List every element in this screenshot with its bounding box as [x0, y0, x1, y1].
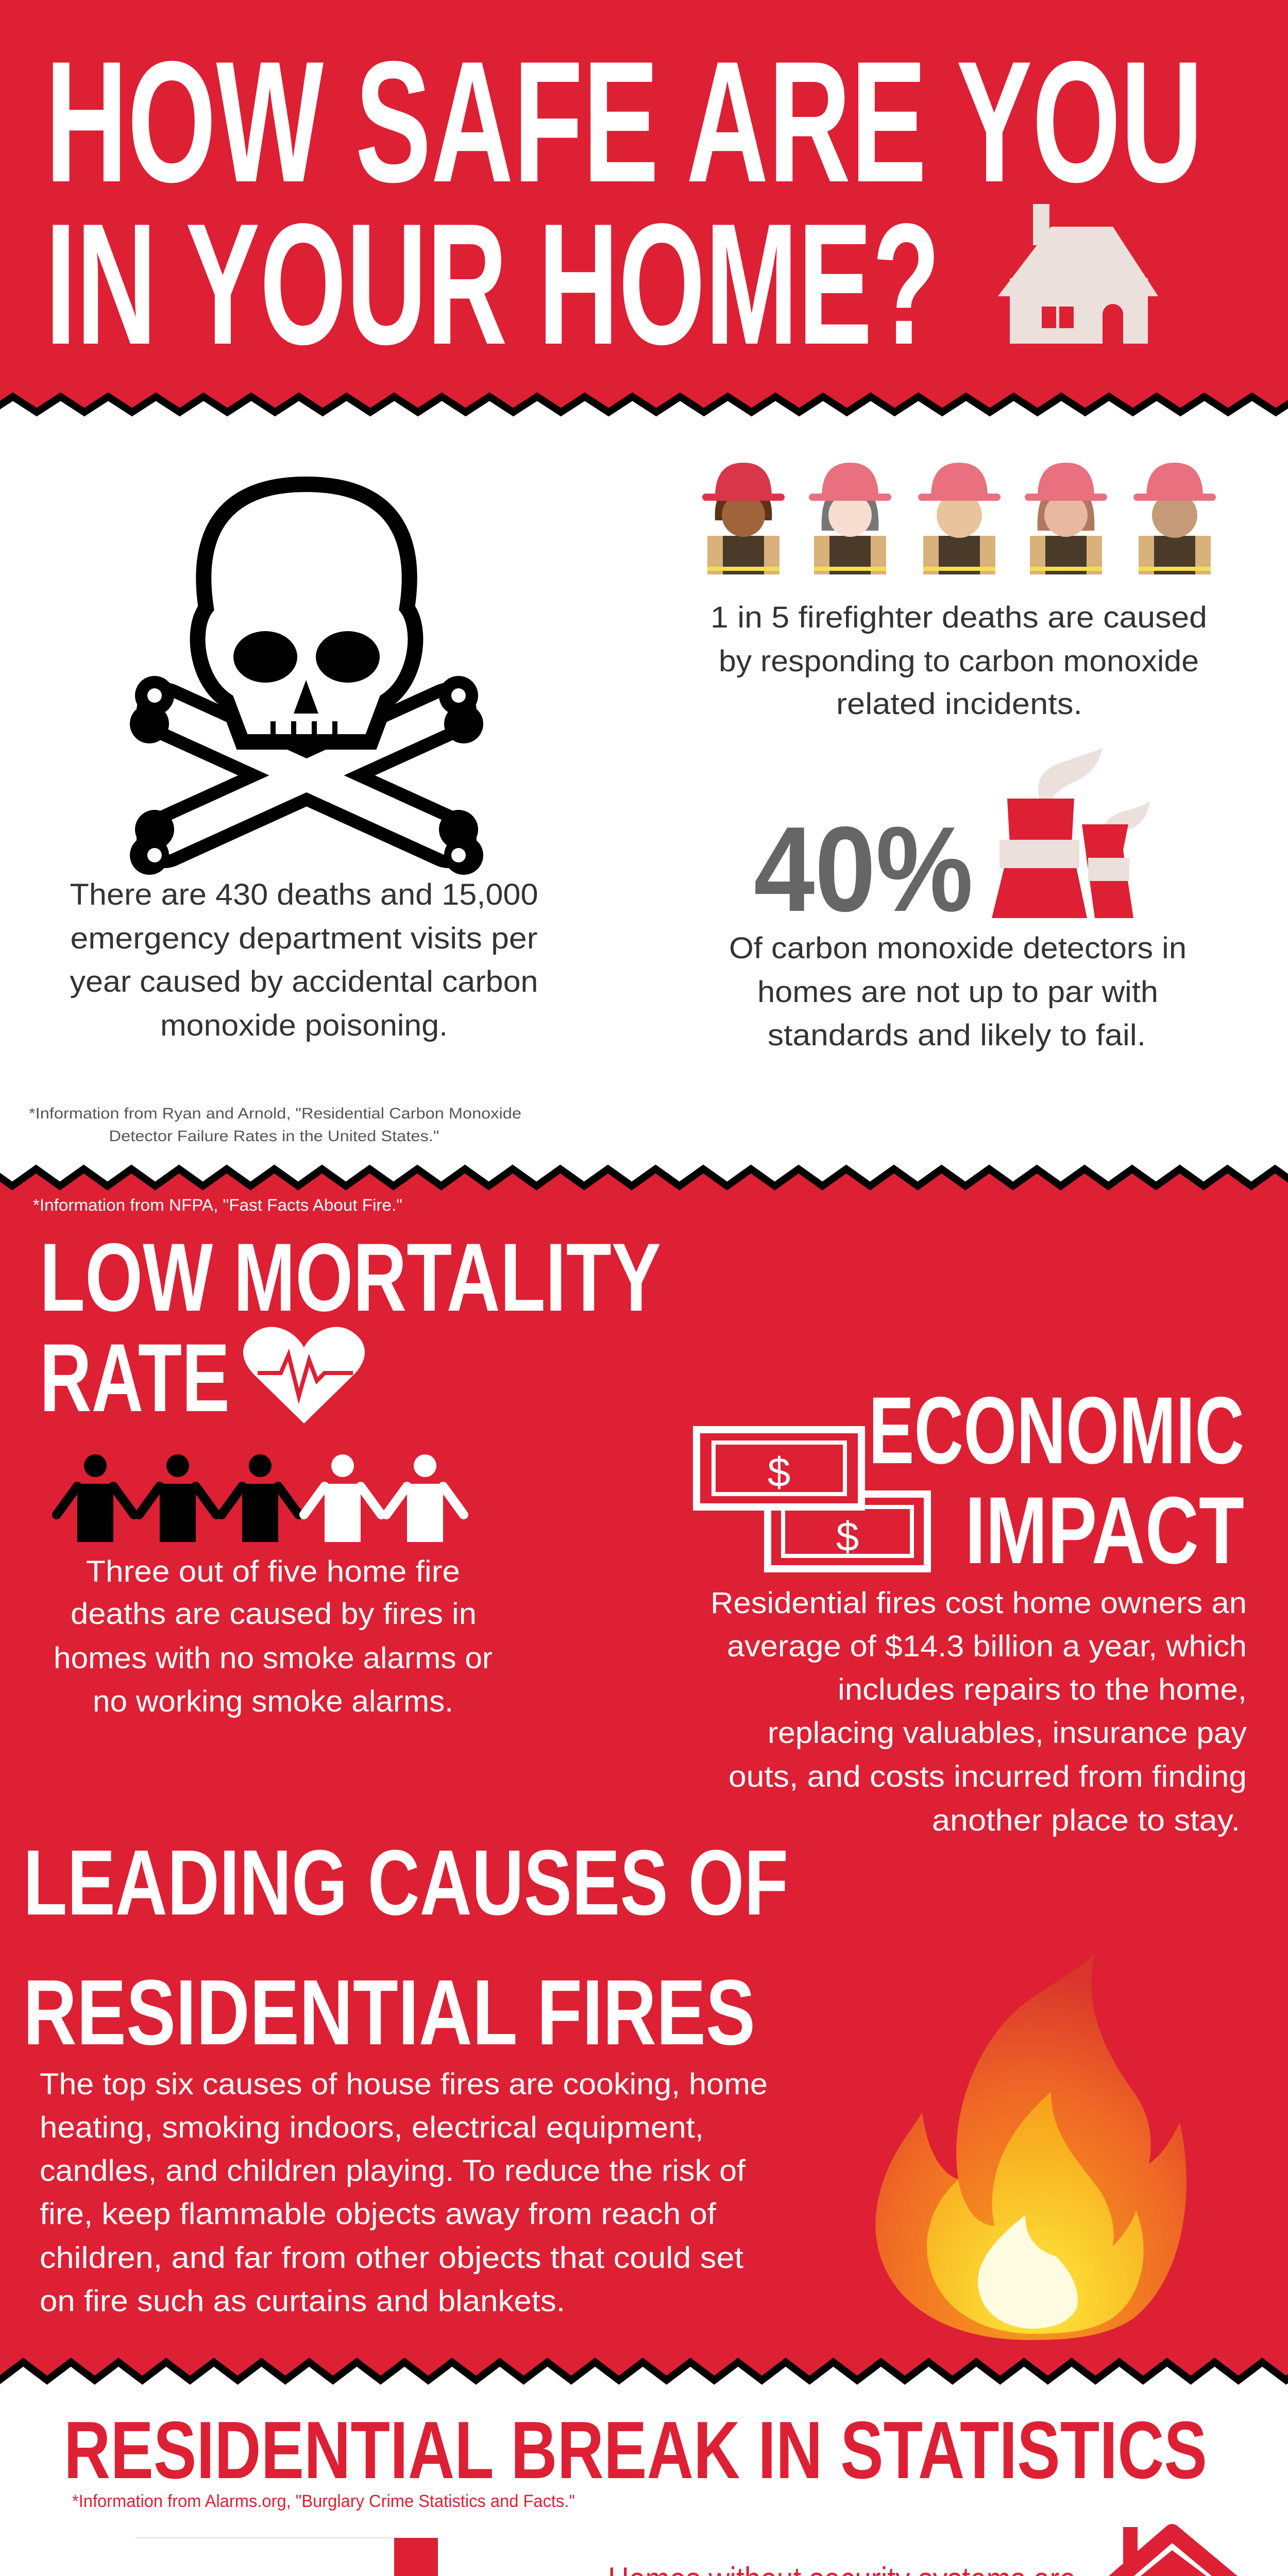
- icon: money bills: [697, 1430, 927, 1569]
- icon: five firefighters: [702, 463, 1216, 574]
- text: causes paragraph: fire, keep flammable objects away from reach of: [40, 2197, 717, 2231]
- icon: heart with pulse: [243, 1327, 365, 1423]
- footnote: Ryan and Arnold: *Information from Ryan and Arnold, "Residential Carbon Monoxide: [29, 1105, 521, 1122]
- text: smoke alarms: no working smoke alarms.: [93, 1685, 453, 1718]
- text: carbon monoxide deaths: There are 430 deaths and 15,000: [70, 878, 538, 911]
- text: 40% detectors: standards and likely to fail.: [768, 1019, 1146, 1052]
- text: firefighter deaths: 1 in 5 firefighter deaths are caused: [710, 601, 1207, 634]
- heading: leading causes of residential fires: RESIDENTIAL FIRES: [23, 1961, 755, 2064]
- text: 40% detectors: homes are not up to par with: [757, 975, 1158, 1009]
- heading: leading causes of residential fires: LEADING CAUSES OF: [23, 1831, 788, 1935]
- icon: skull and crossbones: [130, 484, 483, 875]
- heading: economic impact: [869, 1378, 1244, 1584]
- text: smoke alarms: Three out of five home fire: [86, 1555, 460, 1588]
- text: smoke alarms: deaths are caused by fires in: [71, 1597, 477, 1631]
- title: [45, 25, 1203, 380]
- text: economic impact: average of $14.3 billion a year, which: [727, 1630, 1247, 1663]
- text: causes paragraph: candles, and children playing. To reduce the risk of: [40, 2154, 746, 2188]
- text: economic impact: [710, 1586, 1247, 1837]
- stat: 40%: 40%: [754, 801, 973, 937]
- footnote: alarms.org: *Information from Alarms.org, "Burglary Crime Statistics and Facts.": [72, 2492, 575, 2511]
- footnote: NFPA: *Information from NFPA, "Fast Facts About Fire.": [33, 1196, 402, 1214]
- heading: low mortality rate: LOW MORTALITY: [40, 1223, 661, 1331]
- text: causes paragraph: [40, 2067, 768, 2318]
- text: smoke alarms: [54, 1555, 493, 1718]
- text: carbon monoxide deaths: monoxide poisoning.: [160, 1009, 448, 1042]
- text: causes paragraph: The top six causes of house fires are cooking, home: [40, 2067, 768, 2101]
- heading: leading causes of residential fires: [23, 1831, 788, 2064]
- icon: red house: [1097, 2527, 1249, 2576]
- icon: fire: [875, 1954, 1187, 2340]
- bar chart: break ins: [79, 2538, 453, 2576]
- text: economic impact: replacing valuables, insurance pay: [768, 1716, 1247, 1750]
- text: 40% detectors: [729, 931, 1187, 1052]
- text: economic impact: outs, and costs incurred from finding: [728, 1760, 1247, 1793]
- text: carbon monoxide deaths: emergency department visits per: [70, 922, 538, 955]
- text: causes paragraph: on fire such as curtains and blankets.: [40, 2284, 565, 2318]
- text: economic impact: includes repairs to the home,: [838, 1673, 1247, 1706]
- text: smoke alarms: homes with no smoke alarms or: [54, 1641, 493, 1675]
- footnote: Ryan and Arnold: [29, 1105, 521, 1145]
- text: economic impact: another place to stay.: [932, 1804, 1240, 1837]
- text: causes paragraph: children, and far from other objects that could set: [40, 2241, 743, 2275]
- text: carbon monoxide deaths: year caused by accidental carbon: [70, 965, 538, 998]
- text: 40% detectors: Of carbon monoxide detectors in: [729, 931, 1187, 965]
- icon: five people holding hands: [57, 1454, 464, 1542]
- footnote: Ryan and Arnold: Detector Failure Rates in the United States.": [109, 1128, 439, 1145]
- icon: money bills: $: [768, 1449, 790, 1495]
- text: economic impact: Residential fires cost home owners an: [710, 1586, 1247, 1620]
- icon: factory cooling towers: [992, 748, 1150, 918]
- text: firefighter deaths: by responding to carbon monoxide: [719, 645, 1199, 678]
- text: firefighter deaths: [710, 601, 1207, 721]
- heading: low mortality rate: RATE: [40, 1324, 230, 1432]
- text: firefighter deaths: related incidents.: [836, 687, 1082, 721]
- heading: low mortality rate: [40, 1223, 661, 1432]
- icon: house: [998, 204, 1158, 344]
- text: causes paragraph: heating, smoking indoors, electrical equipment,: [40, 2111, 704, 2144]
- icon: money bills: $: [836, 1514, 859, 1560]
- text: carbon monoxide deaths: [70, 878, 538, 1042]
